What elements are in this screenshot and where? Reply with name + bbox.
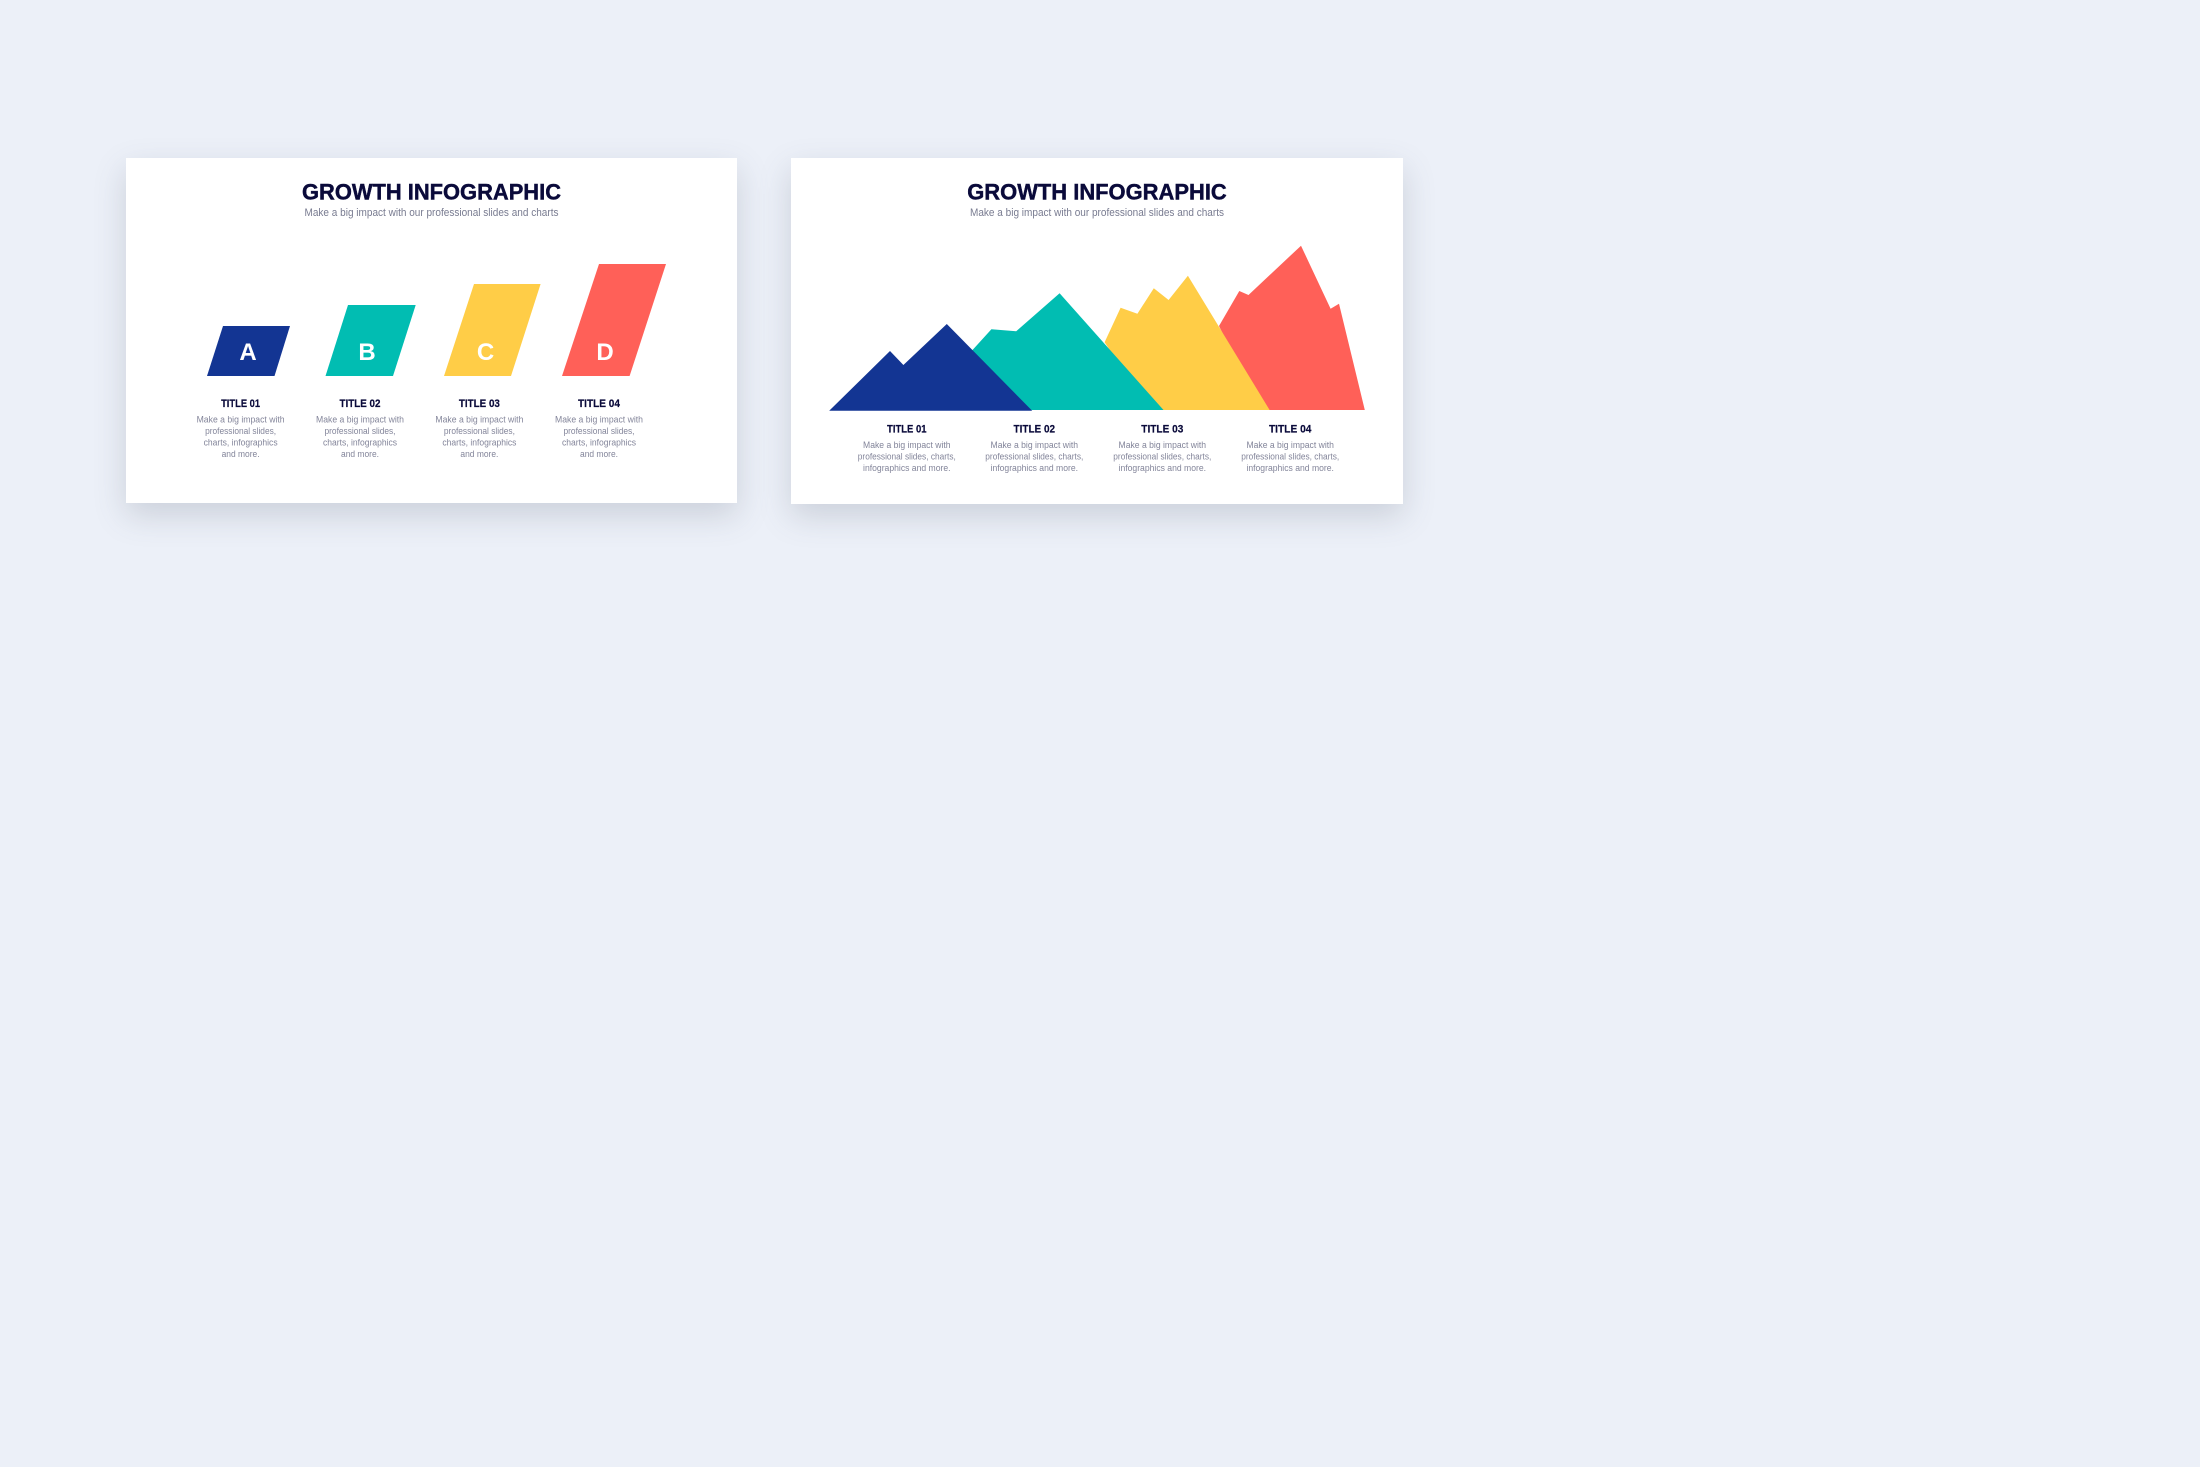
text block: title 03: and more. [460,449,498,459]
text block: title 02: TITLE 02 [1014,424,1055,436]
bar D: D [596,339,614,366]
text block: title 03: infographics and more. [1119,463,1206,473]
bar C: C [477,339,494,366]
text block: title 03: professional slides, charts, [1113,452,1211,462]
text block: title 01: and more. [222,449,260,459]
text block: title 04: professional slides, charts, [1241,452,1339,462]
text block: title 04: charts, infographics [562,438,636,448]
panel: mountain growth slide [791,158,1403,504]
heading: Make a big impact with our professional slides and charts [304,207,559,219]
text block: title 03 [1113,424,1211,473]
text block: title 04: Make a big impact with [555,414,643,424]
heading [967,180,1227,219]
text block: title 04: TITLE 04 [578,398,621,410]
text block: title 02 [316,398,404,459]
text block: title 02: and more. [341,449,379,459]
text block: title 01: TITLE 01 [887,424,927,436]
heading: GROWTH INFOGRAPHIC [302,180,561,204]
text block: title 01: infographics and more. [863,463,951,473]
text block: title 02: Make a big impact with [991,440,1078,450]
text block: title 02: TITLE 02 [340,398,380,410]
text block: title 04 [555,398,643,459]
mountain chart [829,246,1365,411]
text block: title 04 [1241,424,1339,473]
mountain 2: teal [972,293,1164,410]
text block: title 01: professional slides, charts, [858,452,956,462]
bar C [444,284,541,376]
heading: Make a big impact with our professional slides and charts [970,207,1224,219]
text block: title 03: TITLE 03 [459,398,500,410]
text block: title 03: Make a big impact with [435,414,523,424]
bar A: A [239,339,257,366]
bar B: B [358,339,376,366]
text block: title 02: infographics and more. [991,463,1078,473]
mountain 1: blue [829,324,1032,411]
text block: title 01: Make a big impact with [863,440,951,450]
heading: GROWTH INFOGRAPHIC [967,180,1227,204]
text block: title 04: Make a big impact with [1246,440,1334,450]
heading [302,180,561,219]
text block: title 03: Make a big impact with [1119,440,1206,450]
text block: title 02: Make a big impact with [316,414,404,424]
bar D [562,264,666,376]
text block: title 04: infographics and more. [1246,463,1334,473]
text block: title 03: professional slides, [444,426,515,436]
mountain 3: yellow [1105,276,1270,410]
text block: title 02: professional slides, charts, [985,452,1083,462]
text block: title 01: Make a big impact with [197,414,285,424]
text block: title 01: charts, infographics [204,438,278,448]
text block: title 04: professional slides, [564,426,634,436]
text block: title 04: and more. [580,449,618,459]
mountain 4: red [1219,246,1365,410]
text block: title 02 [985,424,1083,473]
text block: title 03: TITLE 03 [1141,424,1183,436]
text block: title 01: professional slides, [205,426,276,436]
text block: title 01 [197,398,285,459]
text block: title 02: charts, infographics [323,438,397,448]
text block: title 03 [435,398,523,459]
text block: title 04: TITLE 04 [1269,424,1312,436]
bar B [326,305,416,376]
text block: title 01: TITLE 01 [221,398,260,410]
panel: parallelogram growth slide [126,158,737,503]
text block: title 03: charts, infographics [442,438,517,448]
text block: title 02: professional slides, [324,426,396,436]
text block: title 01 [858,424,956,473]
bar A [207,326,290,376]
